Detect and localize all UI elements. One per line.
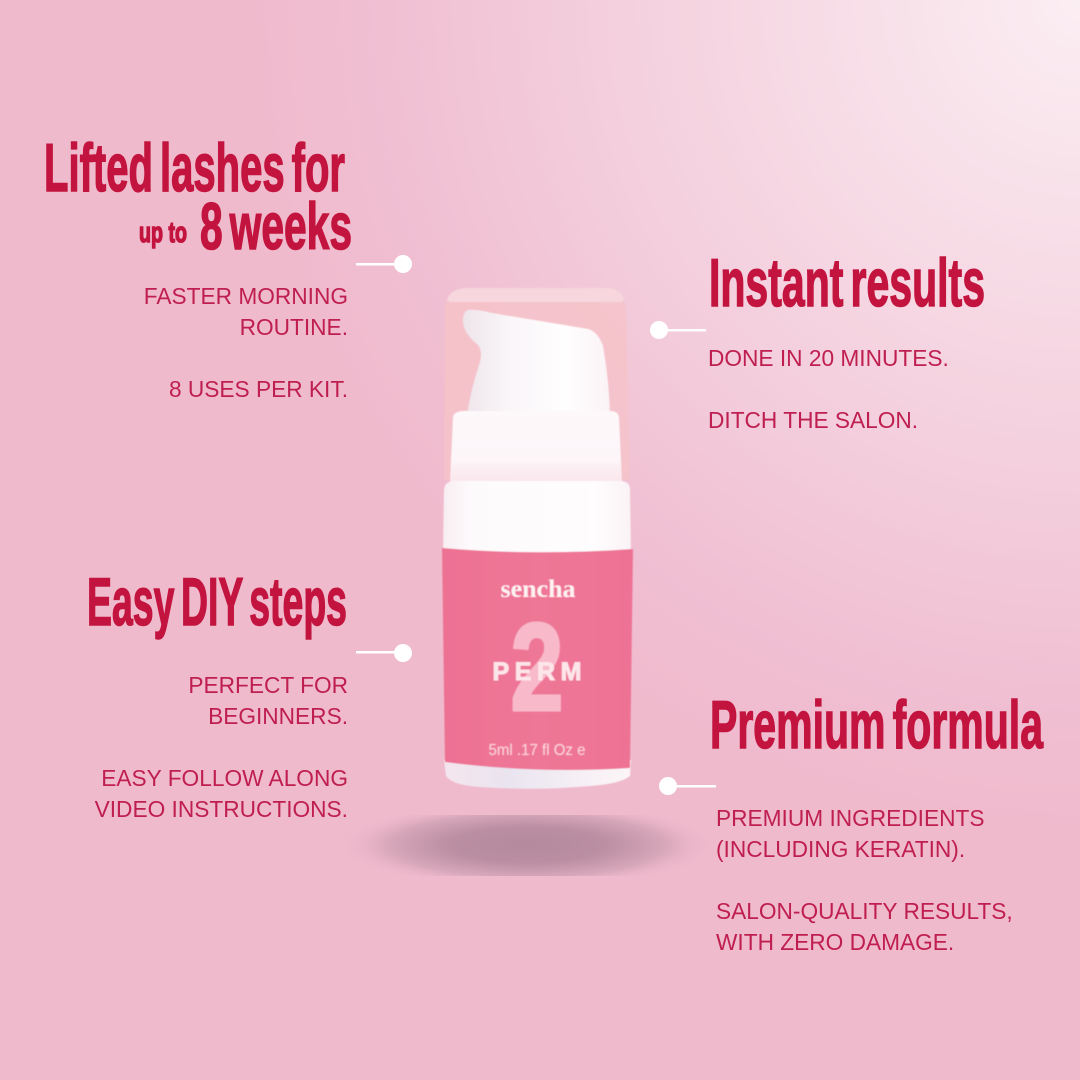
pump nozzle (463, 310, 610, 414)
heading: lifted lashes: up to (139, 217, 187, 249)
volume: 5ml .17 fl Oz e (488, 742, 586, 759)
bottle shoulder (443, 481, 631, 556)
connector: instant results (650, 321, 706, 339)
text: lifted lashes (144, 283, 348, 402)
heading: lifted lashes: 8 weeks (200, 189, 352, 263)
text: instant results (708, 345, 949, 433)
text: instant results: DITCH THE SALON. (708, 407, 918, 433)
text: lifted lashes: 8 USES PER KIT. (169, 376, 348, 402)
heading: easy diy steps: Easy DIY steps (87, 564, 347, 640)
text: easy diy steps: BEGINNERS. (208, 703, 348, 729)
text: instant results: DONE IN 20 MINUTES. (708, 345, 949, 371)
text: easy diy steps: EASY FOLLOW ALONG (101, 765, 348, 791)
connector: easy diy steps (356, 644, 412, 662)
text: premium formula: WITH ZERO DAMAGE. (716, 929, 954, 955)
bottle base (444, 760, 631, 789)
product bottle (442, 288, 633, 789)
panel: instant results (650, 245, 985, 433)
big number 2: 2 (510, 599, 564, 737)
text: easy diy steps: VIDEO INSTRUCTIONS. (95, 796, 348, 822)
panel: lifted lashes (44, 130, 412, 402)
perm label: PERM (492, 658, 582, 686)
text: easy diy steps (95, 672, 348, 822)
brand name: sencha (500, 576, 576, 603)
text: premium formula: (INCLUDING KERATIN). (716, 836, 965, 862)
text: lifted lashes: FASTER MORNING (144, 283, 348, 309)
pink label (442, 548, 633, 770)
text: premium formula: SALON-QUALITY RESULTS, (716, 898, 1013, 924)
product shadow (366, 815, 688, 876)
text: premium formula: PREMIUM INGREDIENTS (716, 805, 984, 831)
heading: lifted lashes (44, 130, 352, 263)
pump collar (450, 411, 622, 482)
text: easy diy steps: PERFECT FOR (188, 672, 348, 698)
heading: lifted lashes: Lifted lashes for (44, 130, 345, 206)
connector: lifted lashes (356, 255, 412, 273)
clear cap (444, 288, 630, 480)
connector: premium formula (659, 777, 716, 795)
text: premium formula (716, 805, 1013, 955)
text: lifted lashes: ROUTINE. (240, 314, 348, 340)
panel: easy diy steps (87, 564, 412, 822)
panel: premium formula (659, 687, 1044, 955)
